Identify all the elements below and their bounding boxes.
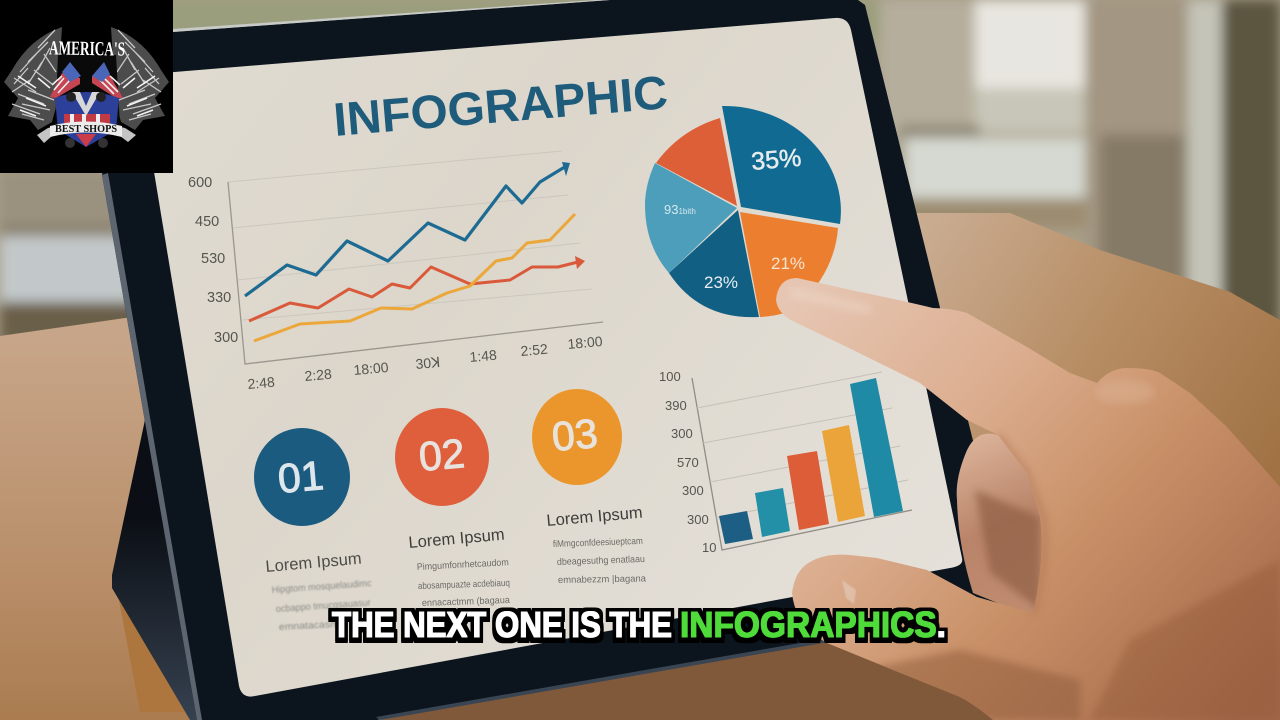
hand shading (790, 292, 1280, 720)
blue line (245, 165, 568, 296)
bezel bottom edge (376, 636, 840, 720)
column text 1: emnatacasm (279, 619, 339, 633)
numbered circle 02: 02 (417, 430, 467, 480)
line chart y-axis labels: 600 (188, 175, 212, 191)
column text 3: emnabezzm |bagana (558, 573, 647, 586)
bar chart y-axis labels: 100 (659, 369, 681, 384)
column text 3: fiMmgconfdeesiueptcam (553, 536, 643, 550)
bar chart y-axis labels: 300 (682, 483, 704, 498)
pie chart: 23% (704, 273, 738, 292)
thumb underside shadow (878, 648, 1081, 720)
title: INFOGRAPHIC (331, 65, 670, 146)
bar chart axes and grid (692, 372, 912, 550)
column text 1: Lorem Ipsum (265, 550, 362, 576)
lower palm shadow (1090, 560, 1280, 720)
column text 3: Lorem Ipsum (546, 504, 643, 530)
line chart (188, 151, 603, 392)
column text 2: Lorem Ipsum (408, 526, 505, 552)
bar chart y-axis labels: 570 (677, 455, 699, 470)
tablet body (102, 0, 1010, 720)
numbered circle 03 (532, 389, 622, 485)
bar chart y-axis labels: 390 (665, 398, 687, 413)
line chart x-axis labels: 18:00 (567, 333, 603, 352)
line chart y-axis labels: 450 (195, 214, 219, 230)
column text 2 (408, 526, 511, 609)
numbered circle 01 (254, 428, 350, 526)
caption: THE NEXT ONE IS THE (332, 604, 672, 645)
line chart y-axis labels: 330 (207, 290, 231, 306)
line chart x-axis labels: 2:28 (304, 366, 333, 384)
logo left flag (50, 62, 81, 98)
bar chart (659, 369, 912, 555)
line chart y-axis labels: 300 (214, 330, 238, 346)
line chart x-axis labels: 30ꓘ (415, 354, 441, 372)
hand, thumb and pointing finger (776, 278, 1280, 720)
pie chart: 21% (771, 254, 805, 273)
logo (0, 0, 173, 173)
numbered circle 02 (395, 408, 489, 506)
hand (776, 278, 1280, 720)
logo banner (37, 122, 136, 148)
bars (719, 511, 753, 544)
line chart x-axis labels: 18:00 (353, 359, 389, 378)
column text 1: ocbappo tmucgsauasur (275, 597, 371, 615)
logo wordmark: AMERICA'S (49, 37, 125, 61)
tablet stand (112, 415, 240, 720)
logo left wing (4, 27, 62, 130)
column text 3: dbeagesuthg enatlaau (557, 554, 645, 568)
line chart x-axis labels: 2:52 (520, 341, 549, 359)
numbered circle 01: 01 (276, 452, 326, 502)
column text 2: ennacactmm (bagaua (422, 595, 511, 609)
tablet screen (138, 18, 962, 697)
line chart grid and axes (228, 151, 603, 364)
numbered circle 03: 03 (550, 410, 600, 460)
yellow line (254, 214, 575, 341)
desk dark front area (180, 635, 1010, 720)
column text 2: Pimgumfonrhetcaudom (417, 557, 509, 573)
caption (332, 604, 946, 645)
logo right flag (92, 62, 123, 98)
column text 1: Hipgtom mosquelaudimc (271, 578, 372, 596)
line chart x-axis labels: 1:48 (469, 347, 498, 365)
column text 1 (265, 550, 372, 633)
shadow between fingers (975, 490, 1040, 610)
pie chart: 35% (750, 144, 802, 176)
line chart x-axis labels (247, 333, 603, 392)
logo shield (55, 92, 119, 147)
column text 3 (546, 504, 647, 586)
wood highlight by stand (118, 595, 185, 712)
pie chart: 931bith (664, 202, 696, 217)
bezel side edge (102, 173, 202, 720)
bar chart y-axis labels: 10 (702, 540, 716, 555)
line chart y-axis labels (188, 175, 238, 346)
bar chart y-axis labels: 300 (687, 512, 709, 527)
caption: INFOGRAPHICS. (680, 604, 946, 645)
bar chart y-axis labels: 300 (671, 426, 693, 441)
desk (0, 213, 1280, 720)
logo centre dark (55, 55, 120, 125)
logo banner: BEST SHOPS (55, 123, 117, 135)
line chart y-axis labels: 530 (201, 251, 225, 267)
finger highlight (790, 292, 870, 310)
logo right wing (111, 27, 169, 130)
red line (249, 261, 582, 321)
knuckle highlight (1098, 382, 1153, 403)
curled middle finger (957, 434, 1055, 620)
thumb nail (842, 580, 856, 604)
bezel top edge (173, 0, 610, 32)
palm crease (998, 435, 1044, 613)
pie chart (645, 106, 841, 317)
column text 2: abosampuazte acdebiauq (418, 578, 510, 592)
bar chart y-axis labels (659, 369, 716, 555)
line chart x-axis labels: 2:48 (247, 374, 276, 392)
